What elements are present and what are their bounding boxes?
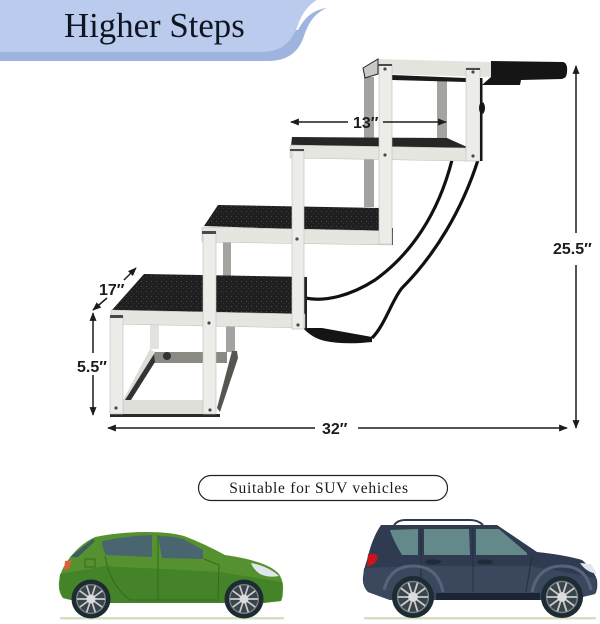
front window [476, 529, 527, 555]
wheel rear [72, 580, 110, 618]
dimension: 5.5 inches [77, 313, 107, 415]
header banner [0, 0, 327, 61]
green hatchback car [59, 532, 284, 620]
step 1 front rail [111, 310, 305, 328]
step 3 front rail [290, 145, 467, 161]
body [363, 525, 597, 600]
right edge and knob [479, 78, 485, 161]
ground shadow [60, 617, 284, 620]
roof rail [394, 520, 483, 525]
strap handle [303, 328, 372, 343]
body [59, 532, 283, 603]
wheel front [541, 576, 583, 618]
dark blue SUV [363, 520, 597, 620]
dimension: 13 inches: 13″ [353, 115, 379, 132]
dimension: 17 inches: 17″ [99, 282, 125, 299]
front legs [110, 65, 480, 414]
title: Higher Steps [64, 6, 245, 45]
headlight [251, 563, 279, 577]
step 3 carpet [291, 137, 467, 150]
dimension: 17 inches [93, 268, 136, 310]
hinges and rivets [110, 64, 480, 412]
back window [70, 539, 95, 557]
door lines [85, 535, 219, 600]
tail light [367, 554, 378, 567]
rear window [102, 535, 152, 557]
top handle [482, 61, 567, 85]
suitability pill label [198, 476, 448, 500]
headlight [580, 563, 597, 574]
dimension: 32 inches: 32″ [322, 421, 348, 438]
middle window [424, 529, 470, 555]
base frame [110, 349, 238, 417]
ground shadow [364, 617, 596, 620]
wheel arches [384, 566, 591, 592]
top rail [363, 59, 491, 82]
folding pet stairs [110, 59, 567, 417]
suitability pill label: Suitable for SUV vehicles [229, 480, 409, 497]
rear window [390, 529, 418, 555]
lower shade [59, 566, 282, 603]
wheel front [224, 580, 264, 618]
wheel rear [392, 576, 434, 618]
front window [158, 536, 203, 559]
step 2 front rail [202, 227, 392, 245]
lower panel [364, 566, 596, 600]
sill [436, 593, 540, 600]
step 2 rear edge [304, 277, 307, 329]
rear legs [150, 77, 447, 352]
dimension: 5.5 inches: 5.5″ [77, 359, 107, 376]
straps [305, 160, 478, 338]
step 1 carpet [112, 274, 307, 316]
dimension: 25.5 inches: 25.5″ [553, 241, 592, 258]
door lines and handles [421, 528, 532, 592]
tail light [64, 560, 72, 570]
step 2 carpet [204, 205, 380, 232]
